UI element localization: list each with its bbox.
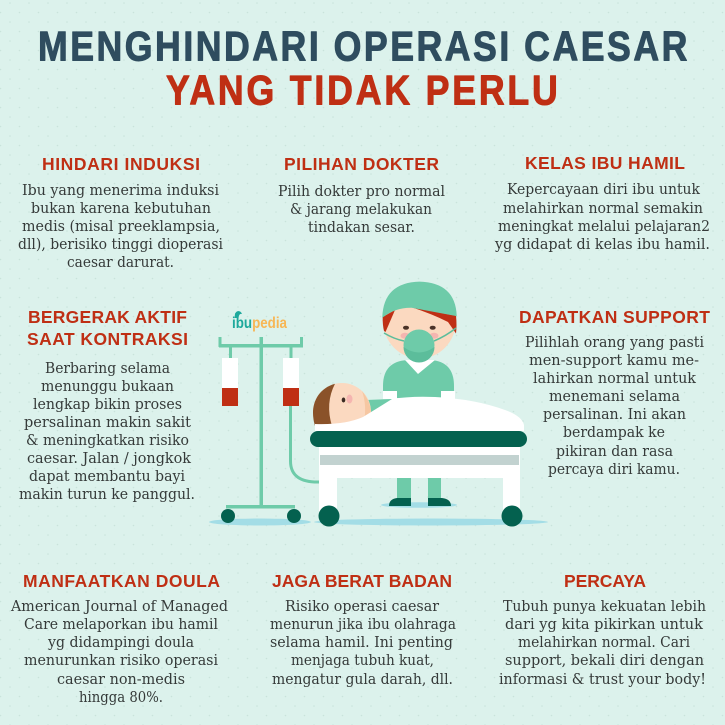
title: MENGHINDARI OPERASI CAESAR [38,24,687,70]
panel: dapatkan support: men-support kamu me- [529,351,699,369]
panel: manfaatkan doula: menurunkan risiko operasi [24,651,218,669]
panel: jaga berat badan: menurun jika ibu olahraga [270,615,456,633]
iv stand [218,337,320,523]
panel: bergerak aktif: menunggu bukaan [41,377,174,395]
title: YANG TIDAK PERLU [166,68,558,114]
panel: manfaatkan doula: Care melaporkan ibu hamil [24,615,218,633]
panel: dapatkan support: percaya diri kamu. [548,460,680,478]
panel: hindari induksi [18,154,223,271]
panel: manfaatkan doula: caesar non-medis [57,670,185,688]
title [38,24,687,114]
panel: dapatkan support: DAPATKAN SUPPORT [519,307,710,327]
panel: percaya: PERCAYA [564,571,646,591]
panel: hindari induksi: caesar darurat. [67,253,174,271]
panel: bergerak aktif [19,307,195,503]
panel: hindari induksi: Ibu yang menerima induksi [22,181,219,199]
panel: percaya: support, bekali diri dengan [505,651,704,669]
panel: percaya: Tubuh punya kekuatan lebih [503,597,706,615]
panel: dapatkan support: lahirkan normal untuk [533,369,697,387]
panel: hindari induksi: medis (misal preeklampsia, [22,217,220,235]
floor shadows [209,502,548,526]
panel: manfaatkan doula: yg didampingi doula [47,633,194,651]
panel: pilihan dokter: Pilih dokter pro normal [278,182,445,200]
panel: percaya: informasi & trust your body! [499,670,706,688]
illustration: hospital scene [209,282,548,526]
panel: manfaatkan doula [10,571,228,706]
panel: kelas ibu hamil: KELAS IBU HAMIL [525,153,685,173]
patient [313,383,392,441]
panel: bergerak aktif: caesar. Jalan / jongkok [27,449,192,467]
panel: hindari induksi: bukan karena kebutuhan [31,199,211,217]
panel: bergerak aktif: persalinan makin sakit [24,413,191,431]
panel: dapatkan support [519,307,710,478]
panel: bergerak aktif: & meningkatkan risiko [26,431,189,449]
panel: percaya: melahirkan normal. Cari [518,633,690,651]
panel: bergerak aktif: SAAT KONTRAKSI [27,329,188,349]
panel: bergerak aktif: makin turun ke panggul. [19,485,195,503]
panel: pilihan dokter: & jarang melakukan [290,200,432,218]
panel: bergerak aktif: lengkap bikin proses [33,395,182,413]
panel: hindari induksi: dll), berisiko tinggi dioperasi [18,235,223,253]
panel: jaga berat badan: JAGA BERAT BADAN [272,571,452,591]
panel: jaga berat badan: Risiko operasi caesar [285,597,440,615]
panel: jaga berat badan: selama hamil. Ini penting [270,633,453,651]
panel: dapatkan support: persalinan. Ini akan [543,405,686,423]
panel: bergerak aktif: Berbaring selama [45,359,170,377]
panel: dapatkan support: pikiran dan rasa [556,442,673,460]
panel: manfaatkan doula: American Journal of Managed [10,597,228,615]
nurse [383,282,456,506]
panel: dapatkan support: Pilihlah orang yang pasti [525,333,704,351]
panel: jaga berat badan [270,571,456,688]
panel: kelas ibu hamil: Kepercayaan diri ibu untuk [507,180,701,198]
panel: kelas ibu hamil: melahirkan normal semakin [503,199,703,217]
logo: ibupedia: ibupedia [232,315,287,332]
panel: pilihan dokter [278,154,445,236]
panel: bergerak aktif: dapat membantu bayi [29,467,185,485]
panel: bergerak aktif: BERGERAK AKTIF [28,307,187,327]
panel: dapatkan support: menemani selama [549,387,680,405]
panel: pilihan dokter: PILIHAN DOKTER [284,154,439,174]
panel: percaya [499,571,706,688]
panel: kelas ibu hamil: yg didapat di kelas ibu hamil. [494,235,710,253]
panel: manfaatkan doula: MANFAATKAN DOULA [23,571,220,591]
panel: hindari induksi: HINDARI INDUKSI [42,154,200,174]
panel: kelas ibu hamil [494,153,710,253]
panel: pilihan dokter: tindakan sesar. [308,218,415,236]
panel: jaga berat badan: menjaga tubuh kuat, [291,651,434,669]
panel: jaga berat badan: mengatur gula darah, dll. [272,670,453,688]
panel: kelas ibu hamil: meningkat melalui pelajaran2 [498,217,710,235]
panel: percaya: dari yg kita pikirkan untuk [505,615,704,633]
bed [310,397,527,526]
panel: dapatkan support: berdampak ke [563,423,665,441]
panel: manfaatkan doula: hingga 80%. [79,688,163,706]
